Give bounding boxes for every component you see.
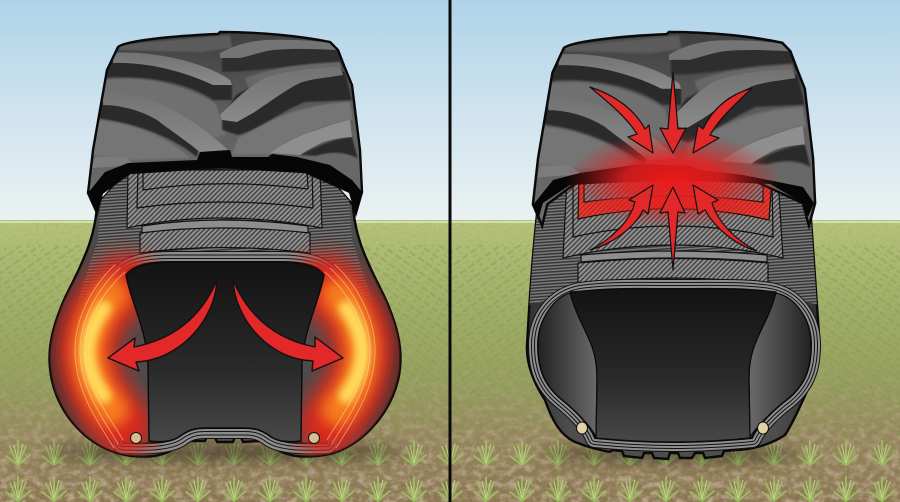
arrow: upper right	[693, 88, 752, 153]
red pressure glow	[565, 132, 781, 228]
arrow: pressure pushing out left	[108, 280, 217, 371]
tread underside black band	[88, 150, 362, 213]
belt and ply hatching	[78, 168, 372, 300]
arrow: bottom centre	[660, 187, 685, 270]
ply layers around the cavity	[538, 289, 811, 442]
tire cavity sidewall interior	[85, 262, 365, 443]
tire casing body	[527, 175, 819, 459]
bead right	[308, 432, 320, 444]
arrow: lower right	[693, 185, 757, 251]
tread underside black band	[533, 164, 814, 220]
tire cavity interior	[538, 289, 811, 442]
bead left	[130, 432, 142, 444]
sky background	[0, 0, 900, 222]
divider between panels	[448, 0, 452, 502]
tread block	[533, 32, 815, 226]
tread block	[88, 32, 362, 213]
ground shadow under tires	[45, 442, 803, 463]
belt and ply hatching	[528, 175, 818, 305]
arrow: lower left	[590, 185, 653, 250]
panel: overloaded tire with bulging sidewalls	[49, 32, 401, 457]
arrow: pressure pushing out right	[233, 280, 343, 371]
arrow: upper left	[590, 87, 653, 153]
ply layers around the cavity	[85, 262, 365, 443]
tire casing body	[49, 168, 401, 457]
central dark cavity panel	[126, 262, 324, 442]
bead left	[576, 422, 588, 434]
heat glow in left and right sidewalls	[75, 265, 375, 448]
field background	[0, 220, 900, 502]
panel: correctly shaped tire with tread pressure	[527, 32, 819, 459]
arrow: top centre	[660, 72, 686, 153]
bead right	[758, 422, 768, 434]
